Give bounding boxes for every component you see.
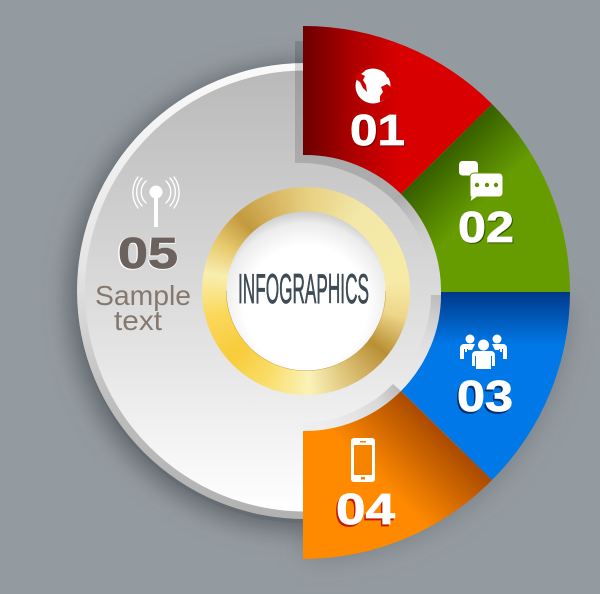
number 02: 02 (458, 203, 514, 252)
icon: people (460, 334, 507, 369)
gold ring inner well (226, 212, 386, 370)
icon: antenna (133, 177, 179, 227)
drop shadow (69, 64, 572, 560)
icon: speech bubbles (459, 161, 503, 202)
segment 03 blue (401, 292, 570, 480)
number 03: 03 (456, 374, 512, 423)
infographic: INFOGRAPHICS (238, 265, 369, 312)
text: Sample text: Sample (95, 280, 191, 311)
band shadows around inner arc (295, 41, 441, 431)
text: Sample text (95, 280, 191, 336)
number 05: 05 (118, 229, 178, 278)
number 04: 04 (334, 487, 394, 536)
number 01: 01 (350, 106, 405, 155)
number 03: 03 (457, 372, 513, 421)
number 02: 02 (459, 204, 515, 253)
text: Sample text: text (114, 305, 162, 336)
number 01: 01 (351, 107, 406, 156)
icon: smartphone (351, 438, 375, 482)
segment 01 red (303, 26, 492, 194)
gold ring (202, 187, 410, 395)
number 04: 04 (336, 485, 396, 534)
segment 04 orange (303, 391, 492, 559)
segment 02 green (401, 104, 570, 292)
icon: globe (355, 68, 391, 104)
panel: grey disc 05 (77, 63, 533, 523)
number 05: 05 (117, 230, 178, 278)
